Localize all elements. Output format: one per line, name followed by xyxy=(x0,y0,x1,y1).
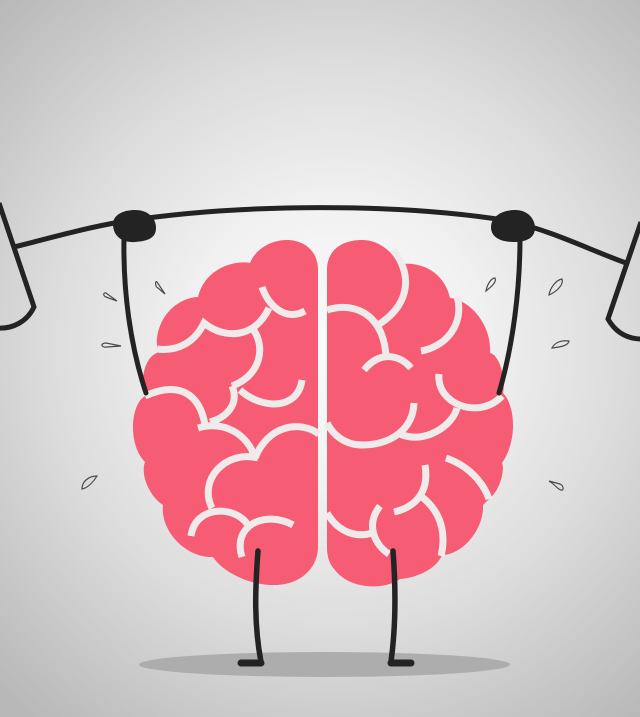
brain xyxy=(133,240,513,586)
left hand xyxy=(113,210,156,242)
right hemisphere folds xyxy=(327,250,502,556)
left weight plate xyxy=(0,203,34,328)
right hemisphere xyxy=(327,240,513,586)
ground shadow xyxy=(139,652,510,677)
right leg xyxy=(391,551,411,663)
right arm xyxy=(499,238,520,393)
left hemisphere xyxy=(133,240,319,585)
left leg xyxy=(241,551,261,663)
left hemisphere folds xyxy=(145,287,319,557)
right weight plate xyxy=(608,222,640,339)
right foot xyxy=(391,660,411,666)
barbell bar xyxy=(14,208,626,263)
left foot xyxy=(241,660,261,666)
sweat drops xyxy=(82,278,569,490)
right hand xyxy=(491,210,535,242)
left arm xyxy=(124,238,146,393)
